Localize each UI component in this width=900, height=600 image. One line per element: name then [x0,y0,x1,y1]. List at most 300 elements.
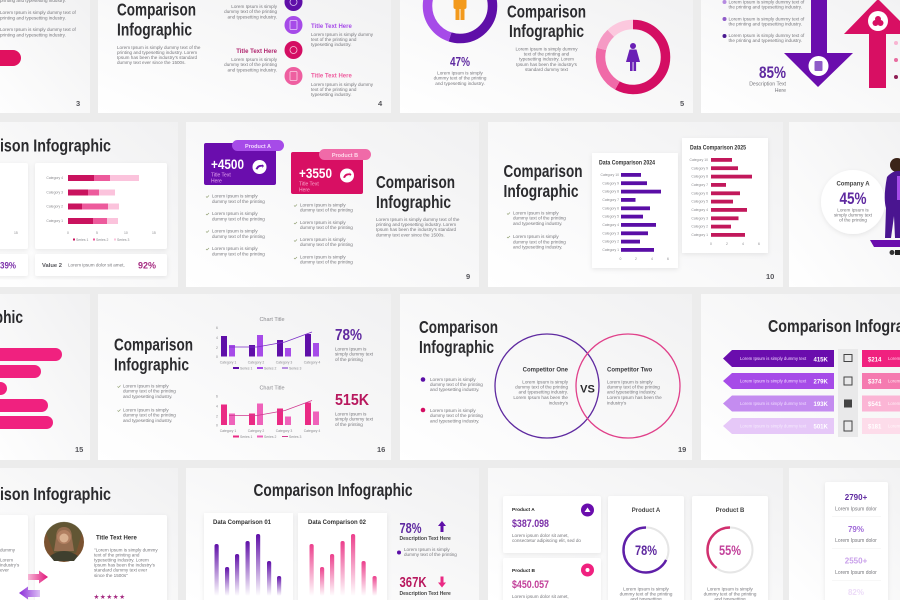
slide 9 paragraph: Ipsum has been the industry's standard [376,227,456,232]
bullet list: Lorem Ipsum is simply dummy text of [728,33,805,38]
stat 47%: and typesetting industry. [435,81,485,86]
chart card 2024: Category 5 [602,215,619,219]
right value rows: Lorem [888,401,900,406]
slide 10 heading [504,161,582,201]
slide 9 paragraph: Lorem Ipsum is simply dummy text of the [376,217,460,222]
combo chart 2: Series 3 [289,435,302,439]
VS label: VS [580,384,595,396]
slide 22: data comparison columns [186,468,479,600]
slide 4 paragraph: Lorem Ipsum is simply dummy text of the [117,45,201,50]
right value rows: Lorem [888,356,900,361]
competitor one text [513,368,569,406]
product A ring card: Lorem Ipsum is simply [623,586,670,592]
slide 19 bullets: Lorem Ipsum is simply [430,408,476,413]
product A checklist: dummy text of the printing [212,252,265,256]
chart card 2025: Category 6 [691,191,708,195]
right testimonial card: "Lorem Ipsum is simply dummy [94,548,158,552]
icon: male figure [454,0,466,20]
right points: Title Text Here [311,24,352,30]
right testimonial card: standard dummy text ever [94,568,148,572]
left arrow rows: Lorem Ipsum is simply dummy text [740,401,807,406]
slide 3: partial list with pink bar: 3 [76,99,80,108]
combo chart 2: Series 1 [240,435,253,439]
slide 16 bullets [118,384,176,423]
product B ring card: Lorem Ipsum is simply [707,586,754,592]
slide 19 heading [419,317,498,357]
slide 5 paragraph: standard dummy text [525,67,569,72]
company A bubble: simply dummy text [834,212,873,218]
left chart card: 15 [14,231,18,235]
right points: Title Text Here [311,74,352,80]
left arrow rows: Lorem Ipsum is simply dummy text [740,424,807,428]
left testimonial card: dummy [0,548,16,552]
right value rows: $181 [868,424,882,430]
competitor two text: dummy text of the printing [607,384,660,390]
photo [44,522,84,562]
column chart card 02: Data Comparison 02 [308,520,367,526]
slide 9 paragraph: dummy text ever since the 1500s. [376,232,445,238]
slide 3: partial list with pink bar: printing and typesetting industry. [0,16,66,20]
left points: and typesetting industry. [228,14,277,20]
combo chart 1: Chart Title [259,317,285,323]
chart card 2024: 2 [635,257,637,261]
combo chart 1: Category 1 [220,360,236,364]
left arrow rows: 279K [814,380,829,386]
stacked bar chart card: Series 2 [96,238,109,242]
product A card: +4500 [211,156,244,172]
slide 15: pink horizontal bars [0,294,90,460]
stats card: 82% [848,588,864,597]
stat 367K with down arrow: 367K [400,574,427,591]
arrows between cards [19,570,48,600]
slide 22 heading: Comparison Infographic [254,480,413,500]
slide 9 heading: Comparison [376,172,455,192]
left points: dummy text of the printing [224,9,277,14]
slide 3: partial list with pink bar: Lorem Ipsum is simply dummy text of [0,27,77,32]
product B checklist: Lorem Ipsum is simply [300,202,346,208]
left arrow rows: Lorem Ipsum is simply dummy text [740,378,807,384]
competitor one text: Lorem Ipsum has been the [513,395,568,400]
chart card 2025: Category 9 [691,166,708,170]
value card: 39%: 39% [0,260,16,270]
slide 11: company comparison with figure [789,122,900,287]
product B price card: Product B [512,568,535,574]
combo chart 1: 2 [216,346,218,350]
chart card 2024: Data Comparison 2024 [599,160,655,166]
competitor two text [607,368,662,406]
chart card 2024: Category 3 [602,231,619,235]
donut: male share [428,0,492,38]
competitor two text: Lorem Ipsum has been the [607,395,662,400]
slide 16 heading [114,334,193,374]
combo chart 1: Series 3 [289,366,302,370]
slide 5 heading [507,2,586,41]
slide 20: arrow row comparison [701,294,900,460]
slide 4 heading: Comparison [117,0,196,20]
stacked bar chart card: Series 3 [117,238,130,242]
left points: Title Text Here [236,49,278,55]
slide 19 bullets [421,377,483,424]
bullet list: the printing and typesetting industry. [728,38,802,43]
right points: typesetting industry. [311,92,352,97]
venn circles [495,334,680,438]
left testimonial card [0,515,28,600]
slide 4 heading [117,0,196,40]
product B checklist: dummy text of the printing [300,242,353,247]
product A checklist: dummy text of the printing [212,216,265,222]
stacked bar chart card: Series 1 [76,238,89,242]
slide 16 heading: Comparison [114,334,193,354]
slide 19: venn comparison: 19 [678,445,686,454]
product B checklist: Lorem Ipsum is simply [300,220,346,225]
chart card 2024 [592,153,678,268]
stat 515K: simply dummy text [335,416,374,422]
slide 6: up and down arrows [701,0,900,113]
right testimonial card: Ipsum has been the industry's [94,562,156,568]
slide 3: partial list with pink bar: printing and typesetting industry. [0,32,66,38]
stacked bar chart card: Category 3 [46,190,63,194]
right testimonial card: typesetting industry. Lorem [94,558,149,562]
product A checklist: dummy text of the printing [212,234,265,239]
chart card 2024: 4 [651,257,653,261]
combo chart 2: 4 [216,404,218,408]
slide 3: partial list with pink bar [0,0,90,113]
combo chart 2: Category 2 [248,429,264,433]
donut: female share [600,24,666,90]
stat 367K with down arrow [400,574,451,597]
slide 16: combo charts: 16 [377,445,385,454]
combo chart 1 [216,317,320,370]
product A checklist: Lorem Ipsum is simply [212,246,258,251]
bullet list: Lorem Ipsum is simply dummy text of [728,16,805,22]
stat 78% [335,327,374,362]
stacked bar chart card: 10 [124,231,128,235]
company A bubble [821,170,885,234]
slide 5 heading: Infographic [509,21,584,41]
left arrow rows: 415K [814,358,829,364]
combo chart 1: Category 3 [276,360,292,364]
stat 85% [749,63,787,94]
company A bubble: 45% [840,189,866,208]
product A ring card: dummy text of the printing [620,592,673,596]
left points: Lorem Ipsum is simply [231,57,278,62]
value card: 92%: Lorem ipsum dolor sit amet, [68,262,125,268]
right points: text of the printing and [311,87,357,92]
slide 10 bullets: dummy text of the printing [513,216,566,220]
product B card [291,149,371,194]
left arrow rows [723,350,834,434]
competitor two text: Lorem Ipsum is simply [607,380,653,384]
slide 21: testimonial comparison [0,468,178,600]
slide 16 bullets: Lorem Ipsum is simply [123,384,169,388]
competitor one text: industry's [549,400,569,406]
value card: 39% [0,254,28,276]
right value rows: Lorem [888,424,900,428]
combo chart 2: Category 1 [220,429,236,433]
chart card 2025 [682,138,768,253]
slide 19 bullets: dummy text of the printing [430,382,483,387]
stat 85%: 85% [759,63,786,82]
center icon strip [838,349,858,437]
combo chart 2: 6 [216,394,218,398]
stats card: Lorem Ipsum dolor [835,570,877,576]
company A bubble: of the printing [839,218,867,222]
product A card [204,140,284,185]
column chart card 02 [298,513,387,600]
chart card 2024: Category 2 [602,240,619,244]
competitor one text: Lorem Ipsum is simply [522,380,569,384]
stat 85%: Here [775,88,786,94]
column chart card 01: Data Comparison 01 [213,520,272,526]
value card: 92%: 92% [138,260,156,270]
chart card 2025: Category 10 [690,158,708,162]
competitor two text: industry's [607,400,627,406]
stat 78% with up arrow: dummy text of the printing [404,552,457,557]
left arrow rows: 501K [814,424,829,430]
combo chart 1: Category 2 [248,360,264,364]
slide 19 heading: Infographic [419,337,494,357]
combo chart 2: 2 [216,414,218,418]
left points: Lorem Ipsum is simply [231,4,278,9]
slide 5 paragraph: Lorem Ipsum is simply dummy [515,46,578,52]
slide 10: data comparison bar charts [488,122,783,287]
slide 10 bullets: Lorem Ipsum is simply [513,234,559,239]
product B price card [503,558,601,600]
chart card 2024: Category 9 [602,181,619,185]
right points: Lorem Ipsum is simply dummy [311,82,374,87]
chart card 2025: Category 3 [691,216,708,220]
chart card 2025: 6 [758,242,760,246]
right value rows: $374 [868,380,882,386]
stat 47%: 47% [450,54,470,69]
slide 19 bullets: and typesetting industry. [430,387,479,392]
left chart card [0,163,28,249]
slide 9 paragraph: printing and typesetting industry. Lorem [376,222,456,227]
product B price card: Lorem ipsum dolor sit amet, [512,594,569,599]
icon circles [284,0,302,85]
right testimonial card: Title Text Here [96,536,137,542]
slide 10 bullets: and typesetting industry. [513,244,562,250]
bullet list [722,0,805,43]
stat 515K [335,392,374,427]
right value rows: $541 [868,402,882,408]
slide 19 bullets: dummy text of the printing [430,413,483,418]
product B price card: $450.057 [512,579,549,591]
chart card 2024: Category 1 [602,248,619,252]
slide 10 bullets: Lorem Ipsum is simply [513,210,559,216]
stat 515K: Lorem Ipsum is [335,412,367,416]
slide 10 bullets: and typesetting industry. [513,221,562,226]
combo chart 1: 0 [216,355,218,359]
combo chart 2: Category 3 [276,429,292,433]
slide 16 bullets: Lorem Ipsum is simply [123,408,169,412]
product A price card: Lorem ipsum dolor sit amet, [512,533,569,538]
product A price card: consectetur adipiscing elit, sed do [512,538,581,543]
stat 78% with up arrow: Lorem Ipsum is simply [404,547,450,552]
product B ring card: 55% [719,542,741,558]
icon: female figure [626,43,640,71]
stat 78%: Lorem Ipsum is [335,346,367,352]
stats card: Lorem Ipsum dolor [835,506,877,512]
chart card 2025: Category 5 [691,200,708,204]
right value rows: $214 [868,358,882,364]
arrow: down [784,0,853,87]
slide 16: combo charts [98,294,391,460]
product A checklist: Lorem Ipsum is simply [212,194,258,198]
competitor one text: Competitor One [523,368,569,374]
product B checklist: dummy text of the printing [300,208,353,212]
right value rows [862,350,900,434]
stat 47%: dummy text of the printing [434,76,487,80]
product A price card [503,496,601,553]
chart card 2025: Category 7 [691,183,708,187]
slide 5 paragraph [515,46,578,72]
slide 16 bullets: dummy text of the printing [123,412,176,418]
stat 78% with up arrow: 78% [400,520,422,537]
stat 78% with up arrow [397,520,457,557]
value card: 92% [35,254,167,276]
slide 5 heading: Comparison [507,2,586,22]
slide 5: two donut charts with person icons: 5 [680,99,684,108]
stats card: 2550+ [845,556,868,566]
right testimonial card: since the 1500s" [94,573,128,578]
pink bullets [894,41,898,79]
competitor one text: dummy text of the printing [515,384,568,390]
combo chart 1: 4 [216,336,218,340]
product A card: Title Text [211,172,231,178]
stacked bar chart card: Category 2 [46,204,63,208]
chart card 2024: 6 [667,257,669,261]
slide 10 bullets [507,210,566,250]
product A checklist: Lorem Ipsum is simply [212,228,258,234]
product B card: Title Text [299,182,319,188]
slide 19 bullets: Lorem Ipsum is simply [430,377,476,382]
slide 5 paragraph: typesetting industry. Lorem [519,56,574,62]
stat 515K: 515K [335,392,369,409]
chart card 2025: Category 8 [691,175,708,179]
product B checklist: Lorem Ipsum is simply [300,254,346,260]
stacked bar chart card [35,163,167,249]
stat 515K: of the printing [335,422,363,427]
slide 16 bullets: and typesetting industry. [123,394,172,399]
slide 9 heading: Infographic [376,192,451,212]
right points [311,24,374,97]
product A checklist: dummy text of the printing [212,199,265,204]
arrow: up [844,0,900,88]
right testimonial card: text of the printing and [94,552,140,558]
right points: text of the printing and [311,37,357,42]
company A bubble: Company A [836,182,870,188]
combo chart 2 [216,386,320,439]
stat 78% with up arrow: Description Text Here [400,536,451,542]
right value rows: Lorem [888,378,900,384]
slide 4 paragraph: Ipsum has been the industry's standard [117,55,197,60]
slide 4: title with four icon points: 4 [378,99,383,108]
column chart card 01 [204,513,293,600]
slide 5 paragraph: Ipsum has been the industry's [516,62,578,67]
product A ring card: Product A [632,508,661,514]
chart card 2024: Category 6 [602,206,619,210]
left points: and typesetting industry. [228,68,277,72]
stats card: Lorem Ipsum dolor [835,538,877,544]
slide 10 heading: Comparison [504,161,582,181]
stacked bar chart card: 15 [152,231,156,235]
stat 47% [434,54,487,86]
chart card 2025: Category 1 [691,233,708,237]
stat 78%: simply dummy text [335,352,374,356]
pink bar chart [0,348,62,429]
stats card [825,482,888,600]
left arrow rows: 193K [814,402,829,408]
slide 8: stacked bar comparison [0,122,178,287]
slide 16 bullets: dummy text of the printing [123,388,176,394]
product B card: Product B [332,153,358,159]
stats card: 79% [848,525,864,534]
left points: dummy text of the printing [224,62,277,67]
chart card 2024: Category 4 [602,223,619,227]
chart card 2024: Category 7 [602,198,619,202]
product B checklist: Lorem Ipsum is simply [300,237,346,242]
slide 9 paragraph [376,217,460,238]
combo chart 2: Chart Title [259,386,285,392]
right points: Lorem Ipsum is simply dummy [311,32,374,37]
slide 10 heading: Infographic [504,181,579,201]
slide 10: data comparison bar charts: 10 [766,272,774,281]
stacked bar chart card: Category 1 [46,219,63,223]
product B card: Here [299,188,310,194]
slide 9 heading [376,172,455,212]
competitor two text: and typesetting industry. [607,390,656,394]
right testimonial card [35,515,167,600]
slide 4 paragraph: printing and typesetting industry. Lorem [117,50,197,55]
combo chart 1: Category 4 [304,360,320,364]
product B ring card [692,496,768,600]
stacked bar chart card: 0 [67,231,69,235]
product B ring card: Product B [716,508,745,514]
product B card: +3550 [299,165,332,181]
combo chart 1: Series 2 [264,366,277,370]
product A price card: Product A [512,507,535,513]
slide 9: product A and B cards [186,122,479,287]
figure on purple platform [870,158,900,255]
product B checklist: dummy text of the printing [300,225,353,230]
slide 3: partial list with pink bar: Lorem Ipsum is simply dummy text of [0,10,77,15]
combo chart 2: 0 [216,424,218,428]
slide 19: venn comparison [400,294,692,460]
product B checklist: dummy text of the printing [300,260,353,264]
combo chart 1: Series 1 [240,366,253,370]
left testimonial card: ever [0,568,9,572]
stat 47%: Lorem Ipsum is simply [437,70,484,76]
slide 4 heading: Infographic [117,20,192,40]
competitor two text: Competitor Two [607,368,653,374]
slide 4 paragraph [117,45,201,65]
left points [224,4,278,72]
combo chart 2: Series 2 [264,435,277,439]
product A checklist [206,194,265,256]
chart card 2024: Category 8 [602,190,619,194]
right points: typesetting industry. [311,42,352,47]
stat 367K with down arrow: Description Text Here [400,591,451,597]
slide 23: product cards and rings [488,468,783,600]
slide 10 bullets: dummy text of the printing [513,240,566,244]
chart card 2025: 0 [710,242,712,246]
combo chart 2: Category 4 [304,429,320,433]
stat 78%: of the printing [335,357,363,362]
competitor one text: and typesetting industry. [519,390,568,394]
chart card 2025: Category 4 [691,208,708,212]
chart card 2025: 2 [726,242,728,246]
